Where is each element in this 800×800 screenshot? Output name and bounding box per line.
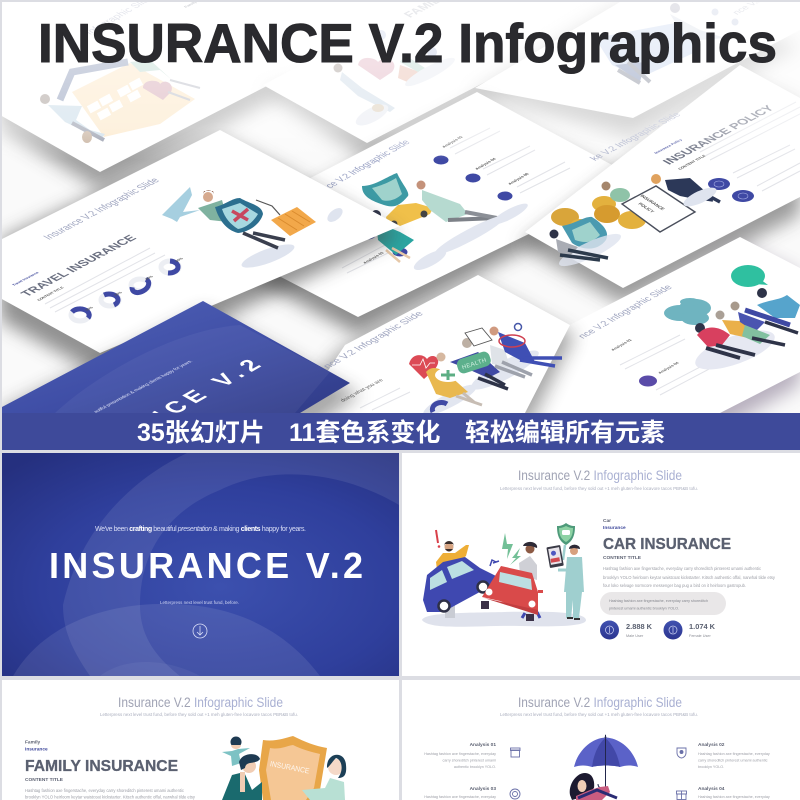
text: analysis 04: Analysis 04 bbox=[698, 786, 725, 792]
text: family insurance block: CONTENT TITLE bbox=[25, 777, 64, 783]
callouts: analysis bullets: Analysis 04 bbox=[474, 157, 498, 170]
text: analysis 01 bbox=[424, 742, 496, 769]
text: family insurance block: FAMILY INSURANCE bbox=[25, 758, 178, 775]
text: analysis 03 bbox=[424, 786, 496, 799]
panel: top-middle family slide bbox=[266, 2, 502, 158]
text: analysis 02: brooklyn YOLO. bbox=[698, 765, 724, 769]
stat: female user bbox=[664, 620, 716, 640]
text: analysis 03: Hashtag fashion axe fingerstache, everyday bbox=[424, 795, 496, 799]
panel: right slide with people and shield: nce V.2 Infographic Slide bbox=[576, 283, 676, 340]
text: family insurance block: Hashtag fashion axe fingerstache, everyday carry shoreditch pinterest umami authentic bbox=[25, 788, 184, 793]
panel: insurance policy slide: Insurance Policy bbox=[653, 138, 684, 154]
callouts: analysis bullets: Analysis 06 bbox=[507, 172, 531, 185]
banner: feature strip: 35张幻灯片 bbox=[137, 419, 265, 447]
panel: centre car-shield slide: nce V.2 Infographic Slide bbox=[319, 138, 413, 192]
panel: blue cover slide: autiful presentation & making clients happy for years. bbox=[93, 359, 195, 414]
banner: feature strip: 11套色系变化 bbox=[289, 419, 440, 447]
icon: coins, policy document and people bbox=[550, 174, 720, 272]
illustration: family with shield: INSURANCE bbox=[269, 759, 310, 776]
icon: down arrow circle bbox=[193, 624, 207, 638]
heading: cover title: INSURANCE V.2 bbox=[49, 545, 363, 586]
illustration: woman under umbrella with house bbox=[570, 734, 638, 800]
title: INSURANCE V.2 Infographics bbox=[38, 12, 777, 74]
callout: analysis bullet bbox=[639, 376, 657, 386]
text: car insurance block: Car bbox=[603, 518, 611, 524]
text: analysis 01: carry shoreditch pinterest umami bbox=[442, 758, 496, 762]
callout: highlighted note bbox=[600, 592, 726, 615]
chart: percentage donuts: 60% bbox=[174, 257, 185, 262]
panel: car insurance slide bbox=[402, 453, 800, 676]
icon: analysis 02 badge bbox=[677, 748, 686, 758]
text: car insurance block: Hashtag fashion axe fingerstache, everyday carry shoreditch pinterest umami authentic bbox=[603, 566, 761, 571]
callout: highlighted note: pinterest umami authentic brooklyn YOLO. bbox=[609, 606, 679, 610]
panel: right slide with people and shield bbox=[579, 237, 800, 413]
heading: slide title: Insurance V.2 Infographic Slide bbox=[518, 468, 682, 483]
panel: blue cover slide bbox=[2, 301, 364, 413]
text: analysis 04 bbox=[698, 786, 770, 799]
panel: isometric slide collage bbox=[0, 0, 800, 439]
panel: travel insurance slide: Travel Insurance bbox=[11, 271, 40, 286]
icon: coins, policy document and people: INSURANCE bbox=[639, 194, 666, 211]
stat: male user: 2.888 K bbox=[626, 622, 653, 631]
icon: speech bubble and cloud bbox=[664, 265, 768, 325]
text: analysis 01: Hashtag fashion axe fingerstache, everyday bbox=[424, 752, 496, 756]
icon: coins, policy document and people: POLICY bbox=[637, 202, 655, 214]
callouts: analysis bullets: Analysis 03 bbox=[362, 251, 386, 264]
icon: heart and family illustration bbox=[334, 30, 458, 130]
panel: travel insurance slide bbox=[0, 130, 400, 375]
text: tagline: We've been crafting beautiful presentation & making clients happy for years. bbox=[95, 526, 306, 533]
text: cover subtitle: Letterpress next level trust fund, before. bbox=[160, 600, 239, 605]
text: car insurance block: Insurance bbox=[603, 525, 626, 531]
text: analysis 02: Analysis 02 bbox=[698, 742, 725, 748]
callouts: analysis bullets bbox=[342, 128, 570, 274]
icon: traveller with shield and suitcase bbox=[162, 187, 345, 272]
chart: percentage donuts: 50% bbox=[84, 306, 95, 311]
text: family insurance block: Insurance bbox=[25, 746, 48, 752]
text: analysis 04: Hashtag fashion axe fingerstache, everyday bbox=[698, 795, 770, 799]
illustration: family with shield bbox=[222, 736, 346, 800]
text: car insurance block: four loko selvage normcore messenger bag pug a bird on it heirloom gastropub. bbox=[603, 583, 746, 588]
icon: house illustration bbox=[40, 60, 200, 143]
stat: male user bbox=[600, 620, 653, 640]
banner: feature strip: 轻松编辑所有元素 bbox=[465, 419, 665, 447]
text: family insurance block: Family bbox=[25, 740, 41, 746]
text: analysis 01: Analysis 01 bbox=[470, 742, 496, 748]
text: family insurance block: brooklyn YOLO heirloom keytar waistcoat kickstarter. Kitsch authentic offal, narwhal tilde etsy bbox=[25, 794, 196, 800]
panel: insurance policy slide: CONTENT TITLE bbox=[677, 154, 708, 170]
text: analysis 03: Analysis 03 bbox=[470, 786, 496, 792]
illustration: car accident scene bbox=[422, 523, 586, 627]
panel: centre car-shield slide bbox=[254, 92, 614, 342]
panel: health slide bbox=[314, 275, 582, 413]
stat: male user: Male User bbox=[626, 634, 644, 638]
icon: group of people with heart and shield bbox=[695, 288, 800, 370]
chart: percentage donuts: 90% bbox=[144, 275, 155, 280]
text: car insurance block: CONTENT TITLE bbox=[603, 555, 642, 561]
panel: umbrella analysis slide bbox=[402, 680, 800, 800]
heading: tilted cover title: ANCE V.2 bbox=[118, 356, 267, 439]
panel: top-right slide bbox=[470, 0, 800, 135]
panel: cover slide bbox=[2, 453, 399, 676]
text: car insurance block: brooklyn YOLO heirloom keytar waistcoat kickstarter. Kitsch authentic offal, narwhal tilde etsy bbox=[603, 575, 776, 580]
icon: analysis 03 ring bbox=[510, 789, 520, 799]
text: analysis 02 bbox=[698, 742, 770, 769]
icon: analysis 04 gift bbox=[676, 791, 686, 800]
panel: travel insurance slide: Insurance V.2 Infographic Slide bbox=[41, 176, 163, 241]
stat: female user: Female User bbox=[689, 634, 711, 638]
icon: roof and person illustration bbox=[595, 3, 738, 83]
heading: travel insurance: TRAVEL INSURANCE bbox=[17, 233, 140, 298]
text: analysis 01: authentic brooklyn YOLO. bbox=[454, 765, 496, 769]
panel: family insurance slide bbox=[2, 680, 399, 800]
callouts: analysis bullets: Analysis 01 bbox=[330, 235, 354, 248]
text: car insurance block: CAR INSURANCE bbox=[603, 536, 731, 553]
panel: car insurance slide: Letterpress next level trust fund, before they sold out +1 meh gluten-free locavore tacos PBR&B tofu. bbox=[500, 486, 698, 491]
panel: family insurance slide: Letterpress next level trust fund, before they sold out +1 meh gluten-free locavore tacos PBR&B tofu. bbox=[100, 712, 298, 717]
decorative fade behind the title bbox=[0, 0, 800, 160]
chart: percentage donuts bbox=[71, 257, 185, 321]
icon: analysis 01 gift box bbox=[510, 748, 520, 757]
heading: insurance policy: INSURANCE POLICY bbox=[659, 103, 777, 166]
banner: feature strip bbox=[2, 413, 800, 450]
heading: slide title: Insurance V.2 Infographic Slide bbox=[118, 695, 283, 710]
callout: highlighted note: Hashtag fashion axe fingerstache, everyday carry shoreditch bbox=[609, 598, 708, 603]
panel: health slide: nce V.2 Infographic Slide bbox=[321, 310, 427, 370]
icon: health team illustration bbox=[409, 324, 562, 420]
panel: insurance policy slide: ke V.2 Infographic Slide bbox=[588, 111, 684, 162]
panel: insurance policy slide bbox=[520, 65, 800, 305]
chart: percentage donuts: 50% bbox=[113, 291, 124, 296]
callouts: analysis bullets: Analysis 02 bbox=[441, 135, 465, 148]
icon: shield, car and people illustration bbox=[362, 173, 530, 274]
panel: umbrella analysis slide: Letterpress next level trust fund, before they sold out +1 meh gluten-free locavore tacos PBR&B tofu. bbox=[500, 712, 698, 717]
text: family insurance block bbox=[25, 740, 196, 800]
panel: travel insurance slide: CONTENT TITLE bbox=[36, 286, 65, 301]
stat: female user: 1.074 K bbox=[689, 622, 716, 631]
panel: right slide with people and shield: Analysis 04 bbox=[657, 361, 681, 374]
text: analysis 02: Hashtag fashion axe fingerstache, everyday bbox=[698, 752, 770, 756]
heading: slide title: Insurance V.2 Infographic Slide bbox=[518, 695, 682, 710]
text: analysis 02: carry shoreditch pinterest umami authentic bbox=[698, 758, 768, 762]
callouts: policy bullets bbox=[708, 145, 800, 202]
icon: health team illustration: HEALTH bbox=[461, 358, 488, 371]
panel: right slide with people and shield: Analysis 01 bbox=[610, 338, 634, 351]
panel: health slide: doing what you are bbox=[340, 378, 386, 403]
text: car insurance block bbox=[603, 518, 776, 588]
panel: top-left house slide bbox=[2, 2, 285, 194]
